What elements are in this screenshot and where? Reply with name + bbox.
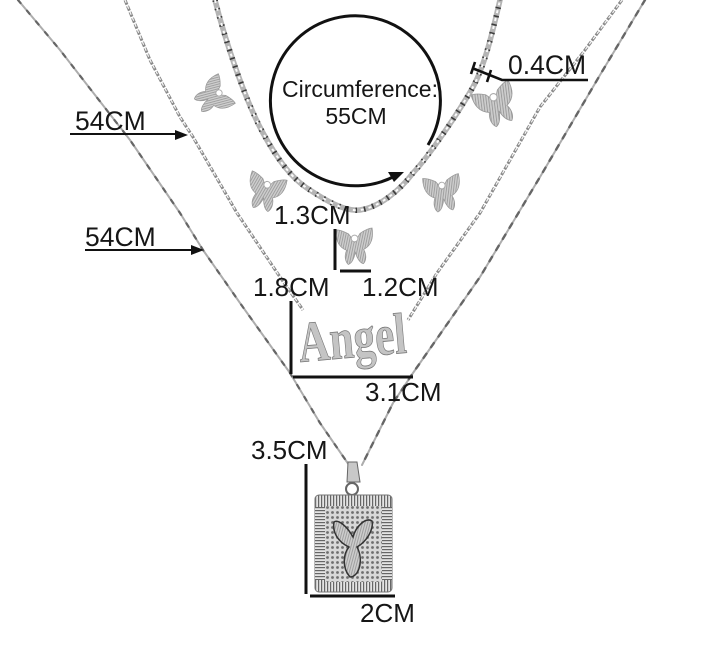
dimension: choker width 0.4CM bbox=[471, 50, 588, 82]
dimension: pendant 3.5CM by 2CM: 2CM bbox=[360, 598, 415, 628]
dimension: charm 1.3CM by 1.2CM: 1.2CM bbox=[362, 272, 439, 302]
butterfly charm: far left bbox=[189, 73, 235, 120]
chain: outer twisted necklace bbox=[18, 0, 645, 465]
dimension: charm 1.3CM by 1.2CM: 1.3CM bbox=[274, 200, 351, 230]
dimension: choker width 0.4CM: 0.4CM bbox=[508, 50, 586, 80]
dimension: chain length left top: 54CM bbox=[75, 106, 146, 136]
pendant plate bbox=[315, 495, 392, 592]
circumference label bbox=[282, 76, 438, 129]
circumference label: 55CM bbox=[325, 103, 387, 129]
pendant bail bbox=[347, 462, 360, 482]
dimension: chain length left bottom bbox=[85, 222, 204, 255]
chain: middle link necklace bbox=[125, 0, 622, 320]
dimension: chain length left top bbox=[70, 106, 188, 140]
butterfly charm: lower right bbox=[422, 174, 463, 213]
butterfly charm: far right bbox=[471, 80, 523, 131]
dimension: Angel 1.8CM by 3.1CM: 3.1CM bbox=[365, 377, 442, 407]
dimension: pendant 3.5CM by 2CM: 3.5CM bbox=[251, 435, 328, 465]
dimension: Angel 1.8CM by 3.1CM bbox=[253, 272, 442, 407]
butterfly charm: lower left bbox=[243, 171, 287, 214]
butterfly charm: center bbox=[336, 228, 374, 265]
dimension: pendant 3.5CM by 2CM bbox=[251, 435, 415, 628]
square butterfly pendant bbox=[315, 462, 392, 592]
circumference label: Circumference: bbox=[282, 76, 438, 102]
dimension: charm 1.3CM by 1.2CM bbox=[274, 200, 439, 302]
dimension: Angel 1.8CM by 3.1CM: 1.8CM bbox=[253, 272, 330, 302]
chain: rhinestone choker bbox=[215, 0, 500, 210]
dimension: chain length left bottom: 54CM bbox=[85, 222, 156, 252]
circumference circular arrow bbox=[270, 16, 440, 186]
pendant butterfly relief bbox=[334, 520, 372, 577]
Angel nameplate pendant: Angel bbox=[295, 301, 409, 375]
